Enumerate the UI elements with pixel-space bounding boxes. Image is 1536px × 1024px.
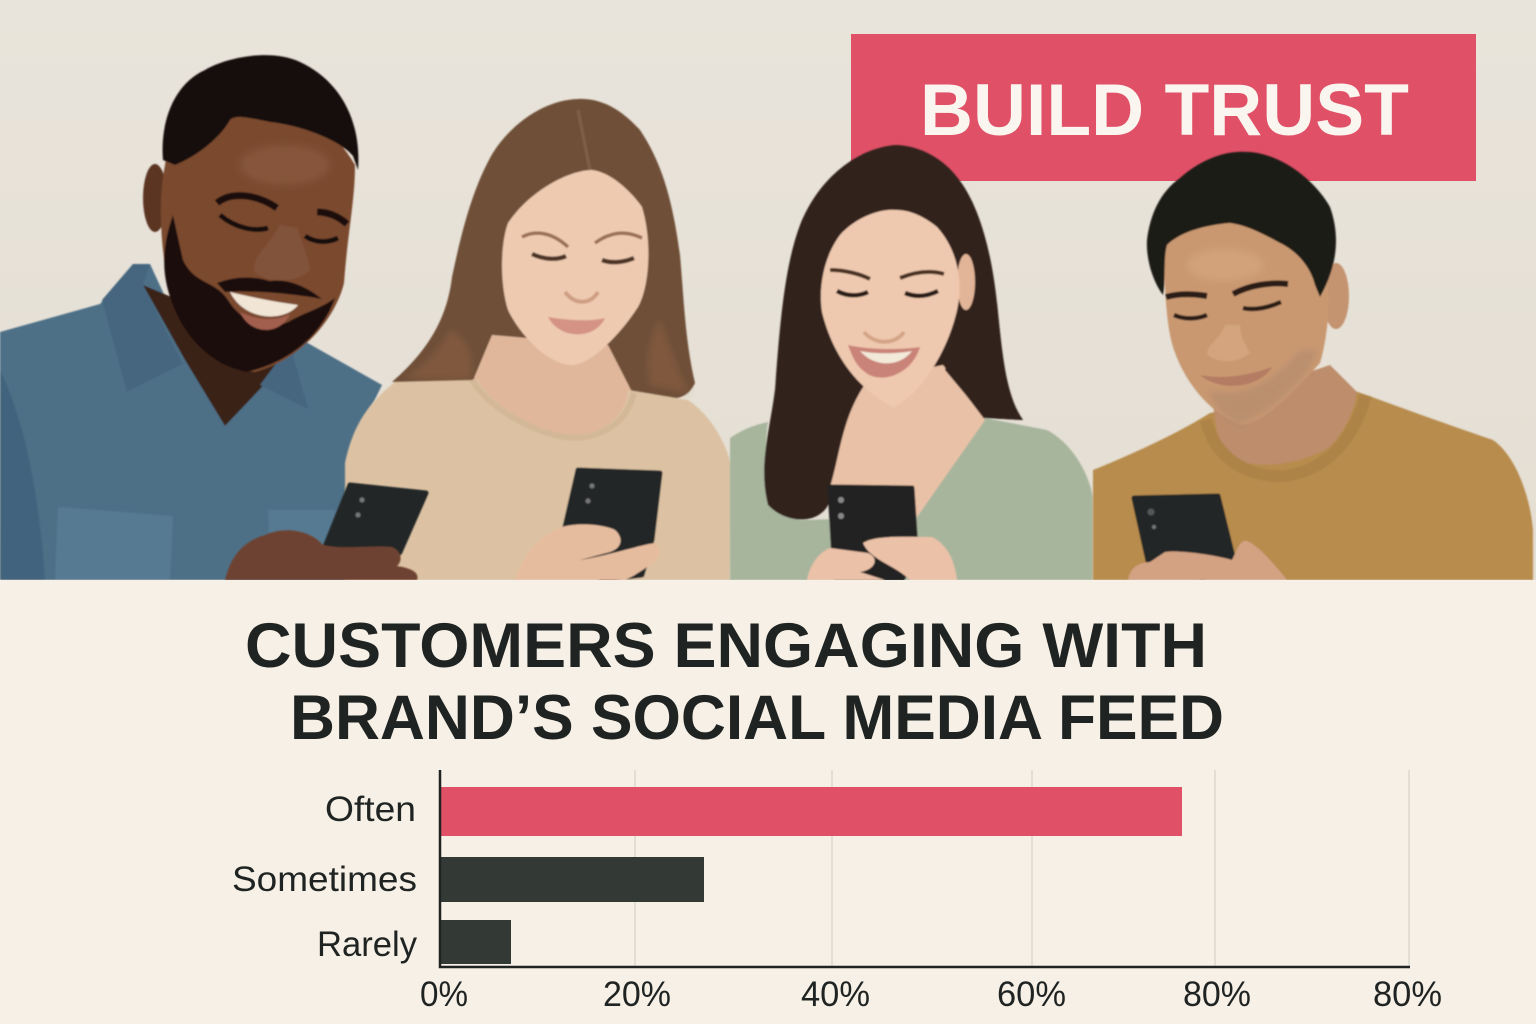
collar rib xyxy=(472,380,634,438)
ear xyxy=(957,254,975,310)
phone xyxy=(1134,496,1233,578)
hand xyxy=(225,530,418,580)
category labels: Often xyxy=(325,790,416,829)
hair side shadow xyxy=(945,303,1023,420)
hand xyxy=(515,524,660,580)
person 3: woman in green top xyxy=(730,145,1093,580)
bar: sometimes xyxy=(441,857,704,902)
banner: build trust xyxy=(851,34,1476,181)
photo panel: four people looking at phones xyxy=(0,0,1536,580)
person 4: man in mustard sweater xyxy=(1093,152,1533,580)
mouth xyxy=(548,317,605,334)
lower panel background xyxy=(0,580,1536,1024)
phone xyxy=(322,482,430,556)
brows xyxy=(830,270,944,279)
category labels: Sometimes xyxy=(232,860,417,899)
face xyxy=(821,210,959,407)
axis tick labels: 40% xyxy=(801,975,870,1014)
nose xyxy=(864,332,904,342)
axes xyxy=(440,770,1410,967)
sweater xyxy=(345,380,732,580)
face xyxy=(161,101,355,372)
sleeve shade xyxy=(0,370,45,580)
wall background xyxy=(0,0,1536,580)
person 1: man in denim shirt xyxy=(0,55,382,580)
forehead highlight xyxy=(1187,249,1263,281)
bar: often xyxy=(441,787,1182,836)
hand xyxy=(807,537,957,580)
person 1 phone and hand xyxy=(225,485,426,580)
brows xyxy=(1166,283,1288,297)
axis tick labels: 0% xyxy=(420,975,468,1014)
person 2: woman in beige sweater xyxy=(345,99,732,580)
bar chart xyxy=(232,770,1442,1014)
gridlines xyxy=(635,770,1409,967)
nose xyxy=(565,292,598,302)
part shade xyxy=(578,110,590,170)
sweater xyxy=(1093,388,1533,580)
shirt xyxy=(0,264,382,580)
eyes xyxy=(220,215,338,242)
hair xyxy=(765,145,1023,519)
hair highlight xyxy=(405,320,688,392)
hair xyxy=(163,55,358,170)
smile lips xyxy=(848,345,920,378)
collar rib xyxy=(1206,395,1366,476)
hand xyxy=(1128,541,1287,580)
eyes xyxy=(1174,302,1281,318)
axis tick labels xyxy=(420,975,1442,1014)
face xyxy=(502,170,648,365)
hair xyxy=(392,99,695,399)
brows xyxy=(217,196,347,224)
axis tick labels: 80% xyxy=(1373,975,1442,1014)
hair xyxy=(1147,152,1336,297)
smile xyxy=(230,292,298,316)
phone xyxy=(830,487,916,578)
lower lip xyxy=(240,312,290,330)
axis tick labels: 80% xyxy=(1183,975,1251,1014)
ear xyxy=(143,164,167,232)
axis tick labels: 20% xyxy=(603,975,671,1014)
phone xyxy=(562,470,660,580)
smile teeth xyxy=(860,351,912,363)
sweater xyxy=(730,418,1093,580)
axis tick labels: 60% xyxy=(997,975,1066,1014)
neck and chest xyxy=(830,365,985,517)
eyes xyxy=(837,291,938,296)
pockets xyxy=(55,507,336,580)
banner: build trust: BUILD TRUST xyxy=(920,70,1409,151)
category labels: Rarely xyxy=(317,925,417,964)
neck xyxy=(143,284,276,426)
nose xyxy=(1208,325,1250,361)
beard xyxy=(164,215,335,372)
neck xyxy=(474,335,632,442)
chart title: CUSTOMERS ENGAGING WITH xyxy=(245,611,1207,681)
chart title: BRAND’S SOCIAL MEDIA FEED xyxy=(290,683,1224,753)
hair front lock xyxy=(764,360,840,520)
nose xyxy=(254,225,310,280)
mouth xyxy=(1200,367,1272,386)
collar xyxy=(102,264,308,409)
category labels xyxy=(232,790,417,964)
brows xyxy=(522,233,642,247)
neck xyxy=(1213,365,1357,465)
stubble xyxy=(1207,350,1318,425)
chart title xyxy=(245,611,1224,753)
ear xyxy=(1323,263,1349,329)
face xyxy=(1163,205,1329,425)
forehead highlight xyxy=(242,146,328,184)
bar: rarely xyxy=(441,920,511,964)
eyes xyxy=(532,254,634,262)
moustache xyxy=(217,277,322,299)
